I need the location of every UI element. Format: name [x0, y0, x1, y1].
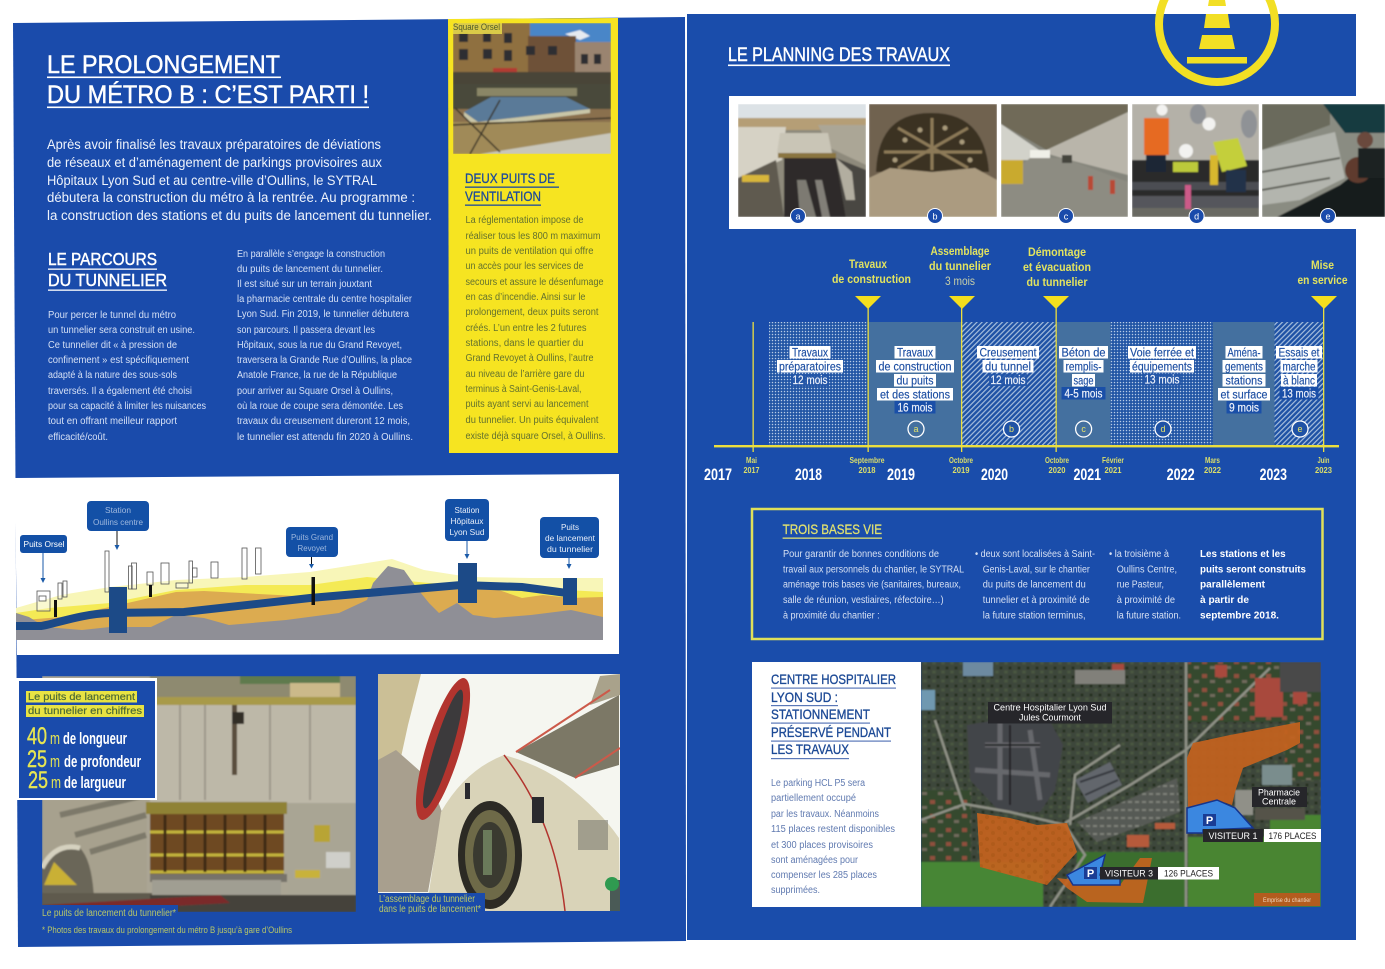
text: parcours column 1: adapté à la nature des sous-sols — [48, 370, 177, 381]
milestone: démontage: Démontage — [1028, 247, 1086, 259]
intro text: la construction des stations et du puits de lancement du tunnelier. — [47, 208, 432, 223]
legend: emprise du chantier — [1254, 893, 1320, 906]
column 4: à partir de — [1200, 594, 1249, 606]
label: pharmacie centrale — [1252, 787, 1307, 807]
text: parcours column 2: où la roue de coupe sera démontée. Les — [237, 401, 403, 412]
milestone: travaux de construction — [832, 259, 911, 286]
text: parcours column 2: du puits de lancement du tunnelier. — [237, 264, 383, 275]
text: supprimées. — [771, 885, 820, 896]
parking visiteur 3: 126 PLACES — [1164, 868, 1213, 878]
heading: TROIS BASES VIE — [783, 521, 882, 537]
text: ventilation: puits ayant servi au lancement — [466, 399, 589, 410]
station boxes — [109, 563, 577, 633]
diagram: tunnel cross-section — [15, 474, 619, 655]
text: ventilation: terminus à Saint-Genis-Laval, — [466, 384, 582, 395]
caption: assemblage: L’assemblage du tunnelier — [379, 894, 476, 905]
chart: timeline — [704, 246, 1348, 484]
text: ventilation: créés. L’un entre les 2 futures — [466, 323, 586, 334]
intro text: de réseaux et d’aménagement de parkings provisoires aux — [47, 155, 382, 170]
column 3: • la troisième à — [1109, 549, 1169, 560]
column 4 — [1200, 548, 1306, 622]
date labels: 2023 — [1315, 465, 1332, 475]
text: sont aménagées pour — [771, 855, 859, 866]
column 2: tunnelier et à proximité de — [983, 595, 1090, 606]
year labels: 2018 — [795, 465, 822, 484]
date labels: 2018 — [858, 465, 876, 475]
milestone: mise en service: en service — [1298, 275, 1348, 287]
right page background — [687, 14, 1356, 940]
label: centre hospitalier: Centre Hospitalier Lyon Sud — [994, 702, 1106, 712]
shafts — [54, 577, 315, 617]
phase: travaux préparatoires: Travaux — [792, 348, 828, 360]
heading: le parcours du tunnelier: LE PARCOURS — [48, 249, 157, 269]
heading: en chiffres — [26, 691, 144, 717]
parking visiteur 1 — [1187, 800, 1321, 842]
photo e: driver view — [1262, 104, 1385, 217]
milestone markers — [855, 296, 1337, 309]
phase: travaux de construction: Travaux — [897, 348, 933, 360]
heading: STATIONNEMENT — [771, 706, 870, 722]
milestone: démontage: et évacuation — [1023, 262, 1091, 274]
callout: Station Hôpitaux Lyon Sud: Station — [454, 505, 480, 515]
phase: voie ferrée — [1128, 346, 1196, 386]
date labels: Septembre — [850, 455, 885, 465]
badges: d — [1194, 212, 1199, 222]
heading: en chiffres: Le puits de lancement — [28, 691, 135, 703]
milestone: travaux de construction: Travaux — [849, 259, 888, 271]
column 1: aménage trois bases vie (sanitaires, bureaux, — [783, 580, 961, 591]
phase: essais: à blanc — [1283, 376, 1315, 388]
heading: CENTRE HOSPITALIER — [771, 671, 896, 687]
phase: travaux de construction — [876, 346, 954, 414]
milestone: travaux de construction: de construction — [832, 274, 911, 286]
callout: Puits Orsel — [20, 535, 67, 583]
callout: Station Oullins centre: Oullins centre — [93, 517, 143, 527]
text: parcours column 2: Hôpitaux, sous la rue du Grand Revoyet, — [237, 340, 402, 351]
year labels: 2017 — [704, 465, 732, 484]
phase: béton de remplissage — [1059, 346, 1108, 400]
phase: creusement — [977, 346, 1039, 387]
photo d: workers on rails — [1132, 104, 1259, 217]
column 1: travail aux personnels du chantier, le SYTRAL — [783, 564, 964, 575]
phase: béton de remplissage: 4-5 mois — [1064, 388, 1103, 400]
phase: aménagements: stations — [1226, 376, 1263, 388]
callout: Puits de lancement du tunnelier: du tunnelier — [547, 544, 593, 554]
date labels: Juin — [1318, 455, 1330, 465]
callout: Puits de lancement du tunnelier — [540, 517, 599, 569]
figure: largueur: 25 — [28, 767, 48, 794]
date labels: Mars — [1205, 455, 1220, 465]
badges — [790, 208, 1336, 224]
badges: b — [932, 212, 938, 222]
photo: square Orsel — [453, 22, 611, 154]
heading: le parcours du tunnelier: DU TUNNELIER — [48, 270, 167, 290]
milestone: démontage — [1023, 247, 1091, 289]
column 1 — [783, 549, 964, 622]
phase: creusement: 12 mois — [990, 375, 1026, 387]
phase: travaux de construction: du puits — [896, 376, 934, 388]
phase: voie ferrée: Voie ferrée et — [1130, 348, 1195, 360]
text: ventilation: Grand Revoyet à Oullins, l’autre — [466, 353, 594, 364]
phase: aménagements: 9 mois — [1229, 402, 1259, 414]
text: parcours column 2: pour arriver au Square Orsel à Oullins, — [237, 386, 393, 397]
milestone: assemblage du tunnelier: Assemblage — [930, 246, 990, 258]
date labels: 2017 — [744, 465, 760, 475]
panel: photo strip — [729, 96, 1385, 229]
year labels: 2019 — [887, 465, 915, 484]
phase: béton de remplissage: Béton de — [1062, 348, 1106, 360]
heading: deux puits de ventilation: VENTILATION — [465, 189, 541, 204]
figure: longueur — [27, 723, 127, 750]
column 1: Pour garantir de bonnes conditions de — [783, 549, 939, 560]
text: ventilation: existe déjà square Orsel, à Oullins. — [466, 431, 606, 442]
text: parcours column 2: Anatole France, la rue de la République — [237, 370, 397, 381]
year labels: 2021 — [1074, 465, 1101, 484]
text: 115 places restent disponibles — [771, 824, 895, 835]
callout: Puits Grand Revoyet: Revoyet — [298, 543, 327, 553]
column 2: la future station terminus, — [983, 611, 1086, 622]
panel: deux puits de ventilation — [448, 18, 618, 453]
column 2: du puits de lancement du — [983, 580, 1086, 591]
text: parcours column 2: le tunnelier est attendu fin 2020 à Oullins. — [237, 432, 413, 443]
phase: travaux de construction: 16 mois — [898, 402, 933, 414]
column 1: à proximité du chantier : — [783, 611, 880, 622]
parking visiteur 1: VISITEUR 1 — [1208, 831, 1258, 841]
phase: travaux préparatoires: préparatoires — [779, 362, 841, 374]
map: aerial view — [921, 662, 1321, 907]
heading: en chiffres: du tunnelier en chiffres — [28, 705, 142, 717]
column 3: Oullins Centre, — [1117, 564, 1177, 575]
text: parcours column 1: un tunnelier sera construit en usine. — [48, 325, 195, 336]
text: ventilation: La réglementation impose de — [466, 215, 584, 226]
column 2: Genis-Laval, sur le chantier — [983, 564, 1090, 575]
photo b: tunnel boring head — [869, 104, 997, 217]
callout: Puits Grand Revoyet: Puits Grand — [291, 532, 333, 542]
text: parcours column 2 — [237, 249, 413, 443]
text: parcours column 2: travaux du creusement dureront 12 mois, — [237, 416, 410, 427]
heading: LES TRAVAUX — [771, 741, 850, 757]
parking visiteur 1: 176 PLACES — [1268, 831, 1316, 841]
heading: le planning des travaux: LE PLANNING DES TRAVAUX — [728, 45, 950, 66]
callout: Puits Orsel: Puits Orsel — [24, 539, 65, 549]
phase: essais: Essais et — [1278, 348, 1320, 360]
column 2: • deux sont localisées à Saint- — [975, 549, 1095, 560]
text: ventilation: du tunnelier. Un puits équivalent — [466, 415, 599, 426]
text: et 300 places provisoires — [771, 840, 873, 851]
badges: a — [795, 212, 801, 222]
text: parcours column 2: son parcours. Il passera devant les — [237, 325, 375, 336]
icon: traffic cone — [1159, 0, 1275, 82]
phase: travaux de construction: et des stations — [880, 390, 950, 402]
callout: Station Hôpitaux Lyon Sud: Lyon Sud — [450, 527, 485, 537]
phase: voie ferrée: 13 mois — [1144, 374, 1180, 386]
phase: béton de remplissage: sage — [1074, 376, 1094, 388]
photo a: trench — [738, 104, 866, 217]
text: ventilation — [466, 215, 606, 442]
text: ventilation: prolongement, deux puits seront — [466, 307, 599, 318]
photo: square Orsel: Square Orsel — [453, 22, 500, 32]
phase letters: b — [1009, 424, 1014, 434]
parking visiteur 3: P — [1087, 868, 1094, 880]
date labels: 2020 — [1048, 465, 1066, 475]
text: ventilation: secours et assure le désenfumage — [466, 277, 604, 288]
text: Le parking HCL P5 sera — [771, 778, 865, 789]
figure: profondeur: m — [50, 752, 60, 771]
text: parcours column 1: Ce tunnelier dit « à pression de — [48, 340, 177, 351]
year labels: 2023 — [1260, 465, 1287, 484]
milestone: mise en service — [1298, 260, 1348, 287]
text: ventilation: en cas d’incendie. Ainsi sur le — [466, 292, 586, 303]
text: parcours column 1: pour sa capacité à limiter les nuisances — [48, 401, 206, 412]
year labels: 2020 — [981, 465, 1008, 484]
text: parcours column 1: traversés. Il a également été choisi — [48, 386, 192, 397]
date labels: 2022 — [1204, 465, 1221, 475]
photo c: tunnel interior — [1001, 104, 1128, 217]
text: ventilation: au niveau de l’arrière gare du — [466, 369, 584, 380]
text: ventilation: stations, dans le quartier du — [466, 338, 584, 349]
heading — [771, 671, 896, 759]
milestone: démontage: du tunnelier — [1026, 277, 1088, 289]
text: parcours column 2: Lyon Sud. Fin 2019, le tunnelier débutera — [237, 309, 409, 320]
milestone: assemblage du tunnelier — [929, 246, 991, 288]
figure: longueur: 40 — [27, 723, 47, 750]
text: parcours column 1 — [48, 310, 206, 443]
phase: aménagements — [1218, 346, 1270, 414]
footnote: * Photos des travaux du prolongement du métro B jusqu’à gare d’Oullins — [42, 925, 292, 935]
parking visiteur 3: VISITEUR 3 — [1105, 868, 1153, 878]
parking visiteur 1: P — [1206, 815, 1213, 827]
text — [771, 778, 895, 896]
panel: trois bases vie — [752, 509, 1322, 639]
heading: LYON SUD : — [771, 689, 838, 705]
date labels: Octobre — [1045, 455, 1069, 465]
text: partiellement occupé — [771, 793, 856, 804]
column 3: à proximité de — [1117, 595, 1175, 606]
figure: profondeur — [27, 746, 141, 773]
column 3: la future station. — [1117, 611, 1181, 622]
phase: creusement: du tunnel — [985, 362, 1031, 374]
phase bands — [769, 322, 1324, 446]
phase: travaux de construction: de construction — [878, 362, 952, 374]
column 4: septembre 2018. — [1200, 610, 1279, 622]
photo: puits de lancement — [42, 676, 356, 913]
text: ventilation: réaliser tous les 800 m maximum — [466, 231, 600, 242]
column 1: salle de réunion, vestiaires, réfectoire…) — [783, 595, 944, 606]
caption: puits de lancement: Le puits de lancement du tunnelier* — [42, 908, 176, 919]
date labels: Février — [1102, 455, 1125, 465]
callout: Station Oullins centre: Station — [105, 505, 131, 515]
date labels: 2019 — [952, 465, 970, 475]
label: pharmacie centrale: Pharmacie — [1258, 788, 1300, 798]
phase letters: a — [913, 424, 919, 434]
intro text: débutera la construction du métro à la rentrée. Au programme : — [47, 190, 415, 205]
intro text: Hôpitaux Lyon Sud et au centre-ville d’Oullins, le SYTRAL — [47, 173, 377, 188]
year labels: 2022 — [1167, 465, 1195, 484]
phase: travaux préparatoires: 12 mois — [792, 375, 828, 387]
column 4: puits seront construits — [1200, 563, 1306, 575]
caption: assemblage — [379, 894, 481, 915]
text: parcours column 1: tout en offrant meilleur rapport — [48, 416, 177, 427]
text: compenser les 285 places — [771, 870, 877, 881]
figure: profondeur: de profondeur — [64, 752, 141, 771]
badges: c — [1064, 212, 1069, 222]
left page background — [13, 17, 686, 947]
date labels — [744, 455, 1332, 475]
phase: aménagements: et surface — [1220, 390, 1268, 402]
figure: largueur: m — [51, 773, 61, 792]
callout: Puits de lancement du tunnelier: de lancement — [545, 533, 596, 543]
column 2 — [975, 549, 1095, 622]
callout: Station Hôpitaux Lyon Sud: Hôpitaux — [450, 516, 484, 526]
caption: assemblage: dans le puits de lancement* — [379, 904, 481, 915]
column 3 — [1109, 549, 1181, 622]
title: LE PROLONGEMENT — [47, 51, 280, 79]
phase: essais: marche — [1282, 362, 1316, 374]
heading: deux puits de ventilation: DEUX PUITS DE — [465, 171, 555, 186]
column 3: rue Pasteur, — [1117, 580, 1164, 591]
text: parcours column 1: efficacité/coût. — [48, 432, 108, 443]
heading: PRÉSERVÉ PENDANT — [771, 724, 891, 740]
figure: largueur: de largueur — [64, 773, 126, 792]
phase: creusement: Creusement — [980, 348, 1037, 360]
intro text: Après avoir finalisé les travaux préparatoires de déviations — [47, 137, 381, 152]
phase: essais — [1276, 346, 1322, 400]
buildings — [37, 548, 261, 611]
year labels — [704, 465, 1287, 484]
text: par les travaux. Néanmoins — [771, 809, 879, 820]
figure: largueur — [28, 767, 126, 794]
phase letters: e — [1297, 424, 1303, 434]
tunnel line — [16, 585, 567, 626]
column 4: parallèlement — [1200, 579, 1265, 591]
axis — [714, 300, 1339, 452]
label: pharmacie centrale: Centrale — [1262, 796, 1296, 806]
text: parcours column 2: En parallèle s’engage la construction — [237, 249, 385, 260]
intro text — [47, 137, 432, 223]
phase: essais: 13 mois — [1282, 388, 1316, 400]
legend: emprise du chantier: Emprise du chantier — [1263, 898, 1311, 904]
callout: Puits de lancement du tunnelier: Puits — [561, 522, 579, 532]
title: DU MÉTRO B : C’EST PARTI ! — [47, 80, 369, 109]
callout: Station Oullins centre — [87, 501, 149, 550]
figure: profondeur: 25 — [27, 746, 47, 773]
photo: assemblage du tunnelier — [378, 673, 620, 911]
badges: e — [1325, 212, 1331, 222]
panel: le puits en chiffres — [16, 678, 157, 800]
milestone: assemblage du tunnelier: du tunnelier — [929, 261, 991, 273]
text: parcours column 1: Pour percer le tunnel du métro — [48, 310, 176, 321]
text: parcours column 2: traversera la Grande Rue d’Oullins, la place — [237, 355, 412, 366]
text: ventilation: un puits de ventilation qui offre — [466, 246, 594, 257]
date labels: Mai — [746, 455, 757, 465]
parking visiteur 3 — [1067, 855, 1219, 885]
milestone: assemblage du tunnelier: 3 mois — [945, 276, 975, 288]
phase letters: d — [1160, 424, 1166, 434]
phase: travaux préparatoires — [777, 346, 843, 387]
phase letters: c — [1081, 424, 1086, 434]
callout: Puits Grand Revoyet — [286, 527, 338, 568]
text: parcours column 1: confinement » est spécifiquement — [48, 355, 189, 366]
text: parcours column 2: la pharmacie centrale du centre hospitalier — [237, 294, 413, 305]
title — [47, 51, 369, 109]
text: ventilation: un accès pour les services de — [466, 261, 584, 272]
figure: longueur: m — [50, 729, 60, 748]
figure: longueur: de longueur — [63, 729, 127, 748]
callout: Station Hôpitaux Lyon Sud — [445, 499, 489, 559]
phase: voie ferrée: équipements — [1132, 362, 1192, 374]
panel: stationnement — [752, 662, 921, 907]
heading: deux puits de ventilation — [465, 171, 559, 206]
text: parcours column 2: Il est situé sur un terrain jouxtant — [237, 279, 372, 290]
date labels: Octobre — [949, 455, 973, 465]
milestone: mise en service: Mise — [1311, 260, 1334, 272]
phase: béton de remplissage: remplis- — [1066, 362, 1102, 374]
phase: aménagements: Aména- — [1228, 348, 1261, 360]
label: centre hospitalier: Jules Courmont — [1019, 712, 1081, 722]
phase: aménagements: gements — [1225, 362, 1263, 374]
label: centre hospitalier — [988, 702, 1112, 724]
construction zone — [977, 722, 1300, 903]
heading: le parcours du tunnelier — [48, 249, 167, 291]
phase letters — [908, 421, 1308, 437]
date labels: 2021 — [1104, 465, 1122, 475]
column 4: Les stations et les — [1200, 548, 1286, 560]
